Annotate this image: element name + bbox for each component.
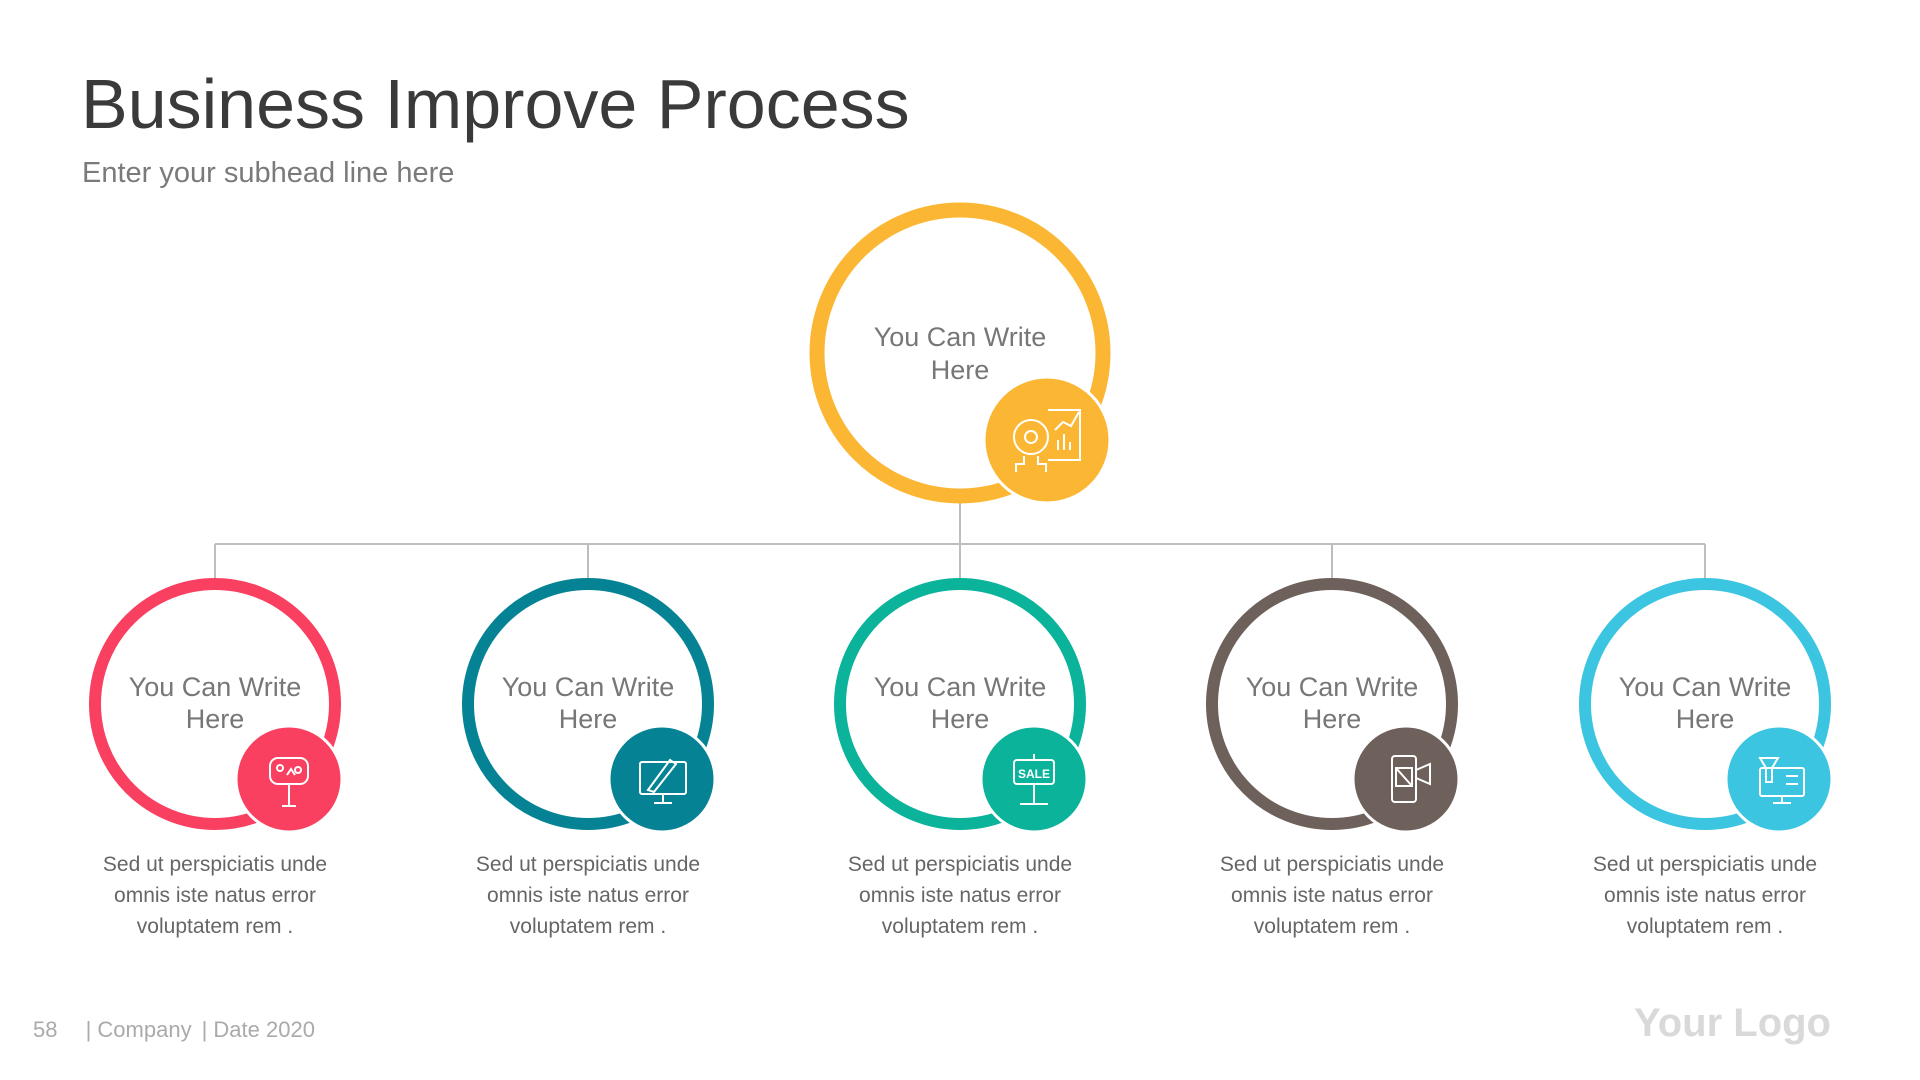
node 1: pink [95, 584, 342, 938]
description 4: voluptatem rem . [1254, 915, 1410, 938]
node 2: dark teal: Here [559, 704, 617, 734]
description 1: voluptatem rem . [137, 915, 293, 938]
description 5 [1593, 853, 1817, 938]
node 2: dark teal [468, 584, 715, 938]
icon: funnel dashboard [1726, 726, 1832, 832]
node 5: cyan [1585, 584, 1832, 938]
icon: idea tree [236, 726, 342, 832]
title: Business Improve Process [81, 65, 910, 143]
description 4 [1220, 853, 1444, 938]
description 2: omnis iste natus error [487, 884, 689, 907]
node 1: pink: Here [186, 704, 244, 734]
node 3: green [840, 584, 1087, 938]
description 5: voluptatem rem . [1627, 915, 1783, 938]
footer: 58 | Company | Date 2020 [33, 1017, 315, 1042]
icon: sale sign: SALE [1018, 767, 1050, 781]
description 1: Sed ut perspiciatis unde [103, 853, 327, 876]
description 2: voluptatem rem . [510, 915, 666, 938]
node 5: cyan: You Can Write [1619, 672, 1791, 702]
top circle node: You Can Write [874, 322, 1046, 352]
node 2: dark teal: You Can Write [502, 672, 674, 702]
description 1: omnis iste natus error [114, 884, 316, 907]
logo: Your Logo [1634, 1001, 1831, 1045]
icon: rocket monitor [609, 726, 715, 832]
node 1: pink: You Can Write [129, 672, 301, 702]
description 4: omnis iste natus error [1231, 884, 1433, 907]
node 3: green: You Can Write [874, 672, 1046, 702]
description 4: Sed ut perspiciatis unde [1220, 853, 1444, 876]
node 4: brown: You Can Write [1246, 672, 1418, 702]
description 3: voluptatem rem . [882, 915, 1038, 938]
icon: analytics head [984, 377, 1110, 503]
description 5: Sed ut perspiciatis unde [1593, 853, 1817, 876]
description 3 [848, 853, 1072, 938]
connector lines [215, 503, 1705, 580]
description 3: omnis iste natus error [859, 884, 1061, 907]
icon: sale sign [981, 726, 1087, 832]
description 2 [476, 853, 700, 938]
subtitle: Enter your subhead line here [82, 157, 454, 189]
icon: phone megaphone [1353, 726, 1459, 832]
top circle node: Here [931, 355, 989, 385]
node 5: cyan: Here [1676, 704, 1734, 734]
description 5: omnis iste natus error [1604, 884, 1806, 907]
description 3: Sed ut perspiciatis unde [848, 853, 1072, 876]
description 2: Sed ut perspiciatis unde [476, 853, 700, 876]
description 1 [103, 853, 327, 938]
top circle node [817, 210, 1110, 503]
node 4: brown: Here [1303, 704, 1361, 734]
node 3: green: Here [931, 704, 989, 734]
node 4: brown [1212, 584, 1459, 938]
